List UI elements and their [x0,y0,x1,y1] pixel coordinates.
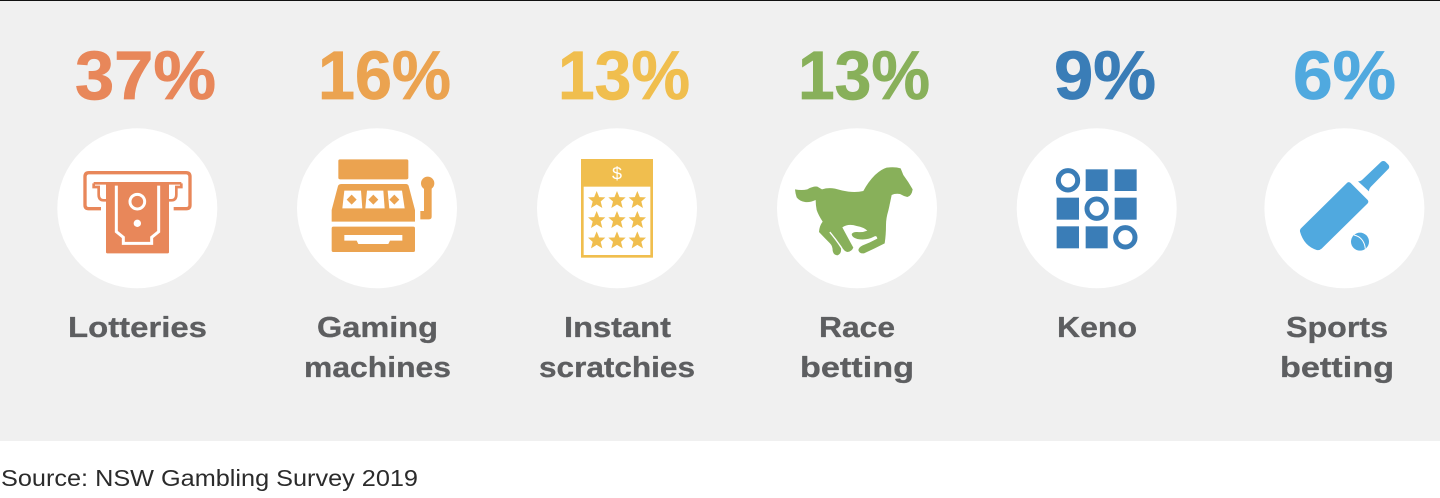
percentage: 9%: 9% [1054,37,1156,114]
column: sports betting [1264,37,1424,384]
label: Gaming machines [304,312,451,384]
column: keno [1017,37,1177,344]
icon: lotteries cash slot [57,128,217,288]
icon: keno grid [1017,128,1177,288]
label: Race betting [800,312,914,384]
label: Instant scratchies: Instant [564,312,671,344]
label: Race betting: betting [800,352,914,384]
icon: slot machine [297,128,457,288]
icon: cricket bat and ball [1264,128,1424,288]
icon: scratch ticket [537,128,697,288]
icon: galloping horse [777,128,937,288]
label: Sports betting: Sports [1286,312,1388,344]
label: Race betting: Race [819,312,895,344]
label: Gaming machines: Gaming [317,312,438,344]
label: Lotteries: Lotteries [68,312,207,344]
percentage: 13%: 13% [558,37,690,114]
label: Sports betting [1280,312,1394,384]
icon: scratch ticket: $ [612,164,622,184]
percentage: 13%: 13% [798,37,930,114]
percentage: 16%: 16% [318,37,451,114]
label: Keno: Keno [1057,312,1137,344]
label: Gaming machines: machines [304,352,451,384]
percentage: 6%: 6% [1293,37,1396,114]
column: lotteries [57,37,217,344]
column: gaming machines [297,37,457,384]
percentage: 37%: 37% [75,37,216,114]
label: Instant scratchies [539,312,695,384]
label: Sports betting: betting [1280,352,1394,384]
top rule [0,0,1440,1]
label: Instant scratchies: scratchies [539,352,695,384]
column: race betting [777,37,937,384]
source note: Source: NSW Gambling Survey 2019 [1,465,418,491]
column: instant scratchies [537,37,697,384]
